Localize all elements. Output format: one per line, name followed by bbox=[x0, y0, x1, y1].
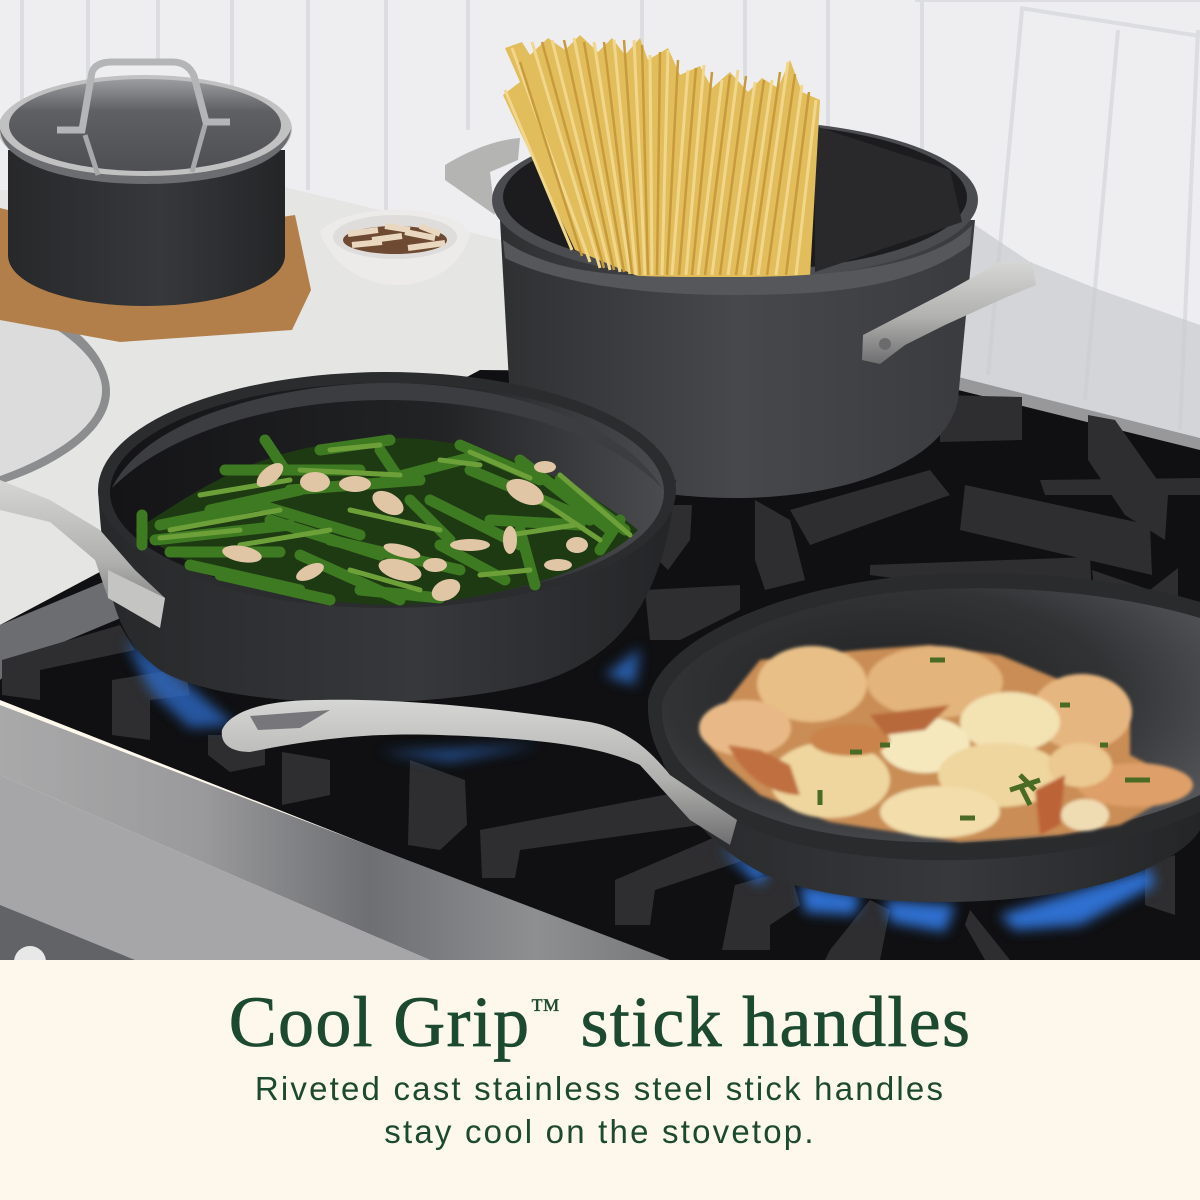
green beans bbox=[135, 438, 638, 605]
spaghetti in the pot bbox=[503, 35, 820, 277]
product photo: cookware on a gas stove bbox=[0, 0, 1200, 960]
frying pan bbox=[648, 573, 1200, 902]
large pot right handle bbox=[862, 262, 1036, 364]
saute pan bbox=[98, 372, 676, 703]
kitchen counter bbox=[0, 187, 510, 630]
caption panel bbox=[0, 960, 1200, 1200]
blue burner flames bbox=[125, 640, 1155, 932]
glass lid on the counter bbox=[0, 296, 110, 484]
large pot rim and interior bbox=[492, 120, 978, 280]
large pot front rim shading bbox=[503, 225, 972, 295]
small pot with glass lid bbox=[0, 62, 292, 306]
wooden cutting board bbox=[0, 208, 311, 342]
sliced almonds on the beans bbox=[221, 459, 588, 605]
saute pan handle bbox=[0, 480, 165, 628]
large pot body bbox=[500, 220, 975, 498]
wall tiles bbox=[0, 0, 1200, 460]
parsley flecks bbox=[820, 660, 1150, 818]
stainless stove front bbox=[0, 705, 670, 978]
stove cooktop bbox=[0, 370, 1200, 960]
large pot left handle bbox=[445, 138, 520, 215]
description text bbox=[255, 1070, 945, 1150]
frying pan handle bbox=[222, 700, 737, 845]
bowl of sliced almonds bbox=[320, 210, 470, 285]
description text: Riveted cast stainless steel stick handles bbox=[255, 1070, 945, 1107]
heading: Cool Grip™ stick handles bbox=[229, 982, 971, 1062]
saute pan rivet bracket bbox=[108, 570, 165, 628]
stove grates bbox=[2, 395, 1200, 960]
shrimp bbox=[699, 645, 1193, 842]
description text: stay cool on the stovetop. bbox=[384, 1113, 816, 1150]
